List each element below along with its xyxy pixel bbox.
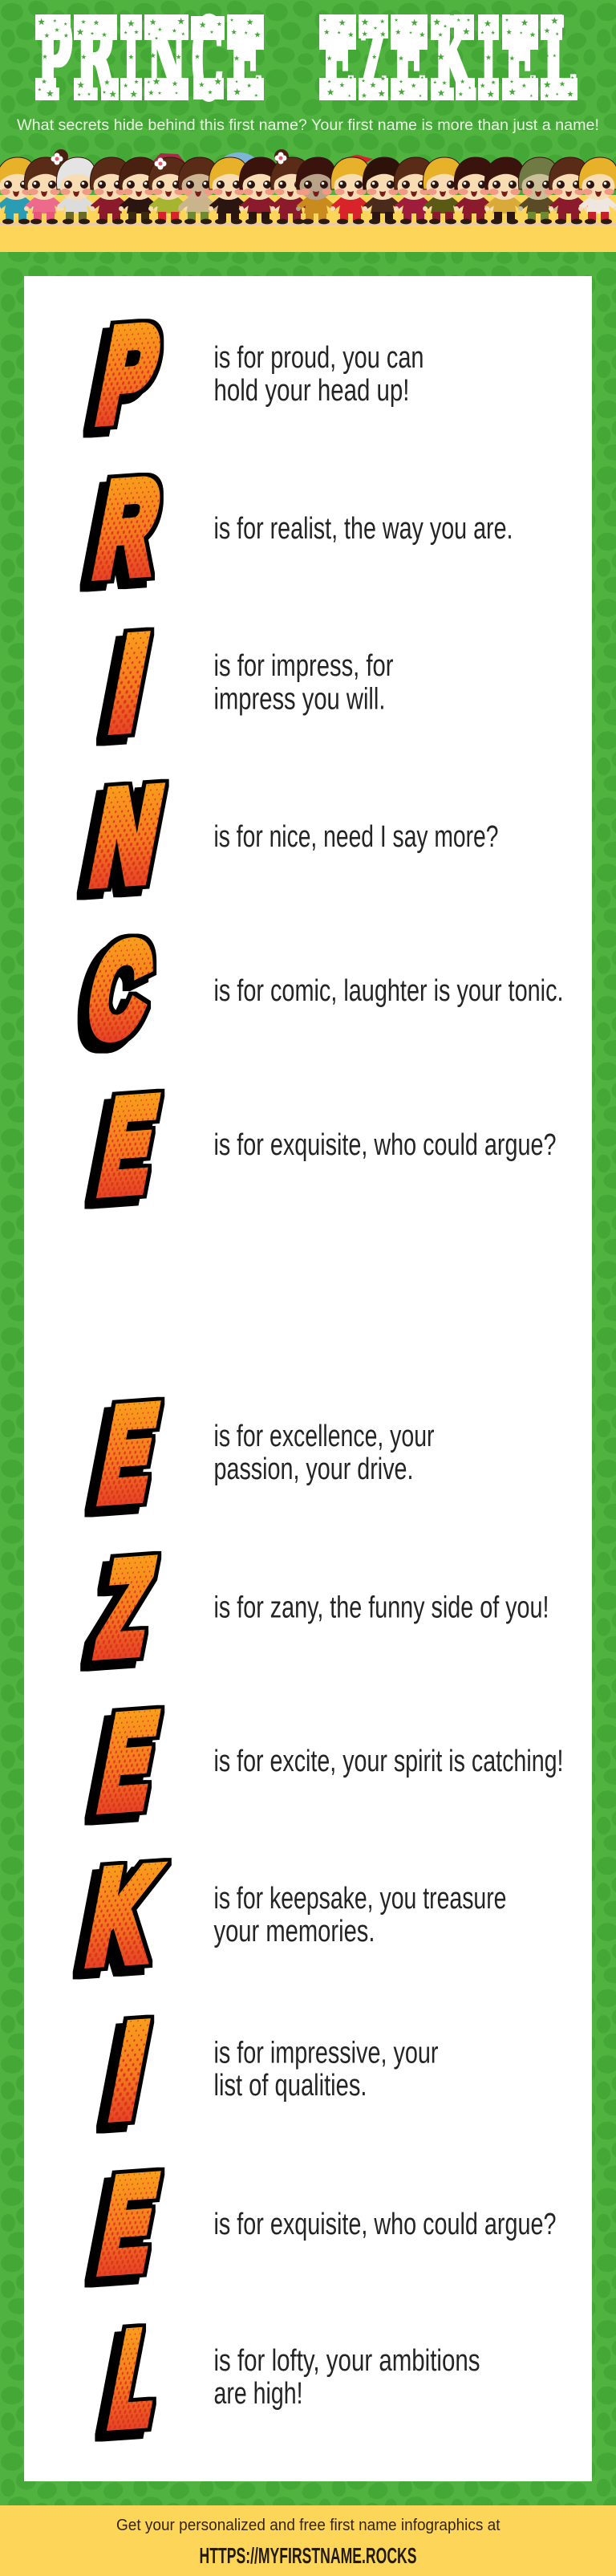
text: impress	[213, 649, 394, 716]
row: E	[91, 2150, 556, 2299]
text: excellence: is for excellence, your	[213, 1420, 435, 1453]
title word: EZEKIEL	[319, 0, 578, 123]
text: impressive: list of qualities.	[213, 2069, 367, 2103]
text: keepsake: your memories.	[213, 1915, 375, 1948]
text: keepsake	[213, 1882, 507, 1948]
letter E: E	[91, 2150, 166, 2299]
text: impressive: is for impressive, your	[213, 2037, 439, 2070]
title: PRINCE EZEKIEL	[35, 0, 578, 123]
row: K	[79, 1841, 507, 1991]
text: proud: is for proud, you can	[213, 341, 424, 375]
text: proud	[213, 341, 424, 408]
text: excellence	[213, 1420, 435, 1486]
row: L	[101, 2304, 480, 2452]
row: P	[89, 299, 424, 449]
row: N	[83, 762, 498, 911]
row of cartoon children	[0, 149, 616, 224]
letter I: I	[102, 1997, 156, 2144]
text: impressive	[213, 2037, 439, 2103]
letter I: I	[102, 610, 156, 757]
text: keepsake: is for keepsake, you treasure	[213, 1882, 507, 1916]
letter E: E	[91, 1379, 166, 1529]
banner: yellow band with row of cartoon children	[0, 149, 616, 252]
letter E: E	[91, 1071, 166, 1221]
row: E	[91, 1071, 556, 1221]
title word: PRINCE	[35, 0, 264, 123]
row: I	[102, 610, 394, 757]
row: R	[86, 453, 513, 603]
text: nice: is for nice, need I say more?	[213, 820, 499, 854]
letter Z: Z	[89, 1534, 162, 1682]
row: E (second name)	[91, 1379, 435, 1529]
footer URL: HTTPS://MYFIRSTNAME.ROCKS	[199, 2543, 417, 2568]
footer text: Get your personalized and free first name infographics at	[116, 2517, 500, 2534]
row: E	[91, 1688, 563, 1837]
text: realist: is for realist, the way you are.	[213, 512, 513, 546]
row: I	[102, 1997, 439, 2144]
panel: white acrostic card	[24, 276, 592, 2481]
text: proud: hold your head up!	[213, 374, 409, 408]
text: lofty: is for lofty, your ambitions	[213, 2344, 480, 2378]
letter C: C	[78, 916, 161, 1065]
letter E: E	[91, 1688, 166, 1837]
letter P: P	[89, 299, 168, 449]
text: lofty	[213, 2344, 480, 2411]
row: C	[78, 916, 564, 1065]
letter L: L	[101, 2304, 170, 2452]
text: excellence: passion, your drive.	[213, 1453, 414, 1486]
letter R: R	[86, 453, 169, 603]
text: lofty: are high!	[213, 2377, 303, 2411]
subtitle: What secrets hide behind this first name? Your first name is more than just a name!	[17, 116, 599, 134]
footer band	[0, 2505, 616, 2576]
letter N: N	[83, 762, 171, 911]
letter K: K	[79, 1841, 165, 1991]
text: impress: is for impress, for	[213, 649, 394, 683]
text: impress: impress you will.	[213, 682, 385, 716]
row: Z	[89, 1534, 549, 1682]
